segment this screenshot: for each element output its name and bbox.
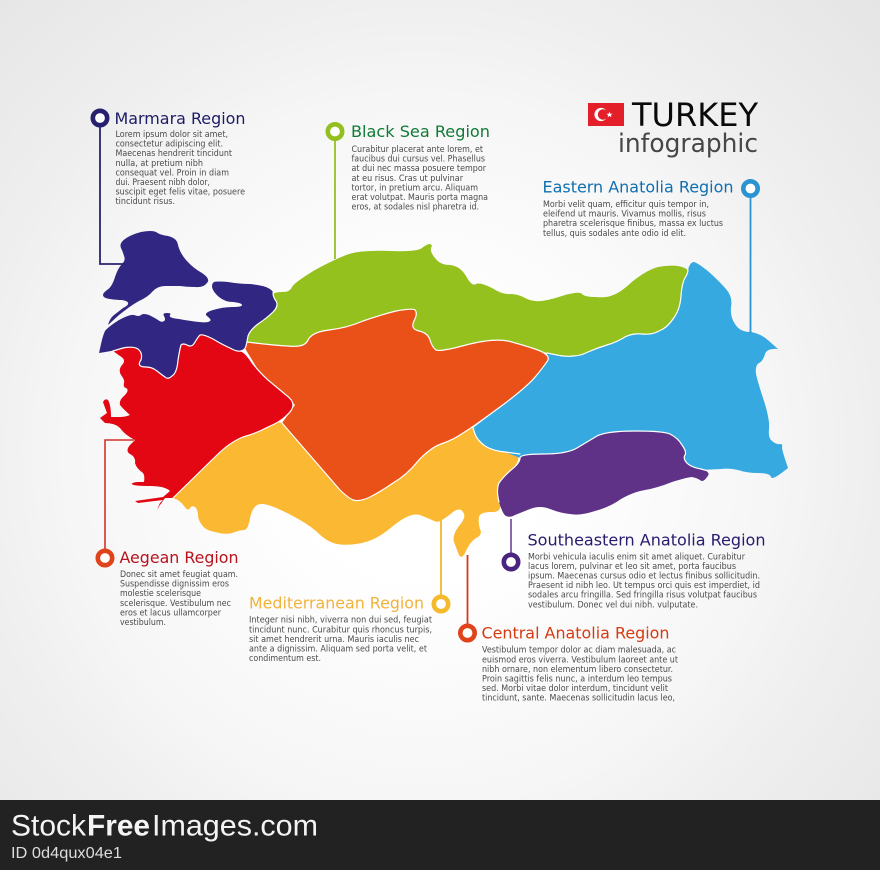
description: suscipit eget felis vitae, posuere <box>116 188 245 198</box>
description: tincidunt nunc. Curabitur quis rhoncus turpis, <box>249 625 432 635</box>
callout: Aegean Region <box>98 440 238 628</box>
description: molestie scelerisque <box>120 589 201 599</box>
description <box>120 570 238 628</box>
region: Black Sea <box>247 244 687 356</box>
header: Turkey infographic <box>588 96 758 159</box>
description: lacus lorem, pulvinar et leo sit amet, porta faucibus <box>528 562 736 572</box>
callout: Eastern Anatolia Region <box>542 178 758 333</box>
watermark logo text: Free <box>87 810 150 842</box>
region title: Eastern Anatolia Region <box>542 178 734 197</box>
callout: Central Anatolia Region <box>460 555 678 704</box>
heading: TURKEY: TURKEY <box>631 96 758 134</box>
description: dui. Praesent nibh dolor, <box>116 178 210 188</box>
description: ante a dignissim. Aliquam sed porta velit, et <box>249 644 427 654</box>
marker <box>98 551 112 565</box>
callout: Southeastern Anatolia Region <box>504 519 766 610</box>
description: Praesent id nibh leo. Ut tempus orci quis est imperdiet, id <box>528 581 760 591</box>
description: condimentum est. <box>249 654 321 664</box>
description: scelerisque. Vestibulum nec <box>120 599 231 609</box>
description: eros et lacus ullamcorper <box>120 608 221 618</box>
description: Suspendisse dignissim eros <box>120 580 229 590</box>
description: pharetra scelerisque finibus, massa ex luctus <box>543 219 723 229</box>
region: Marmara north <box>103 231 208 325</box>
description: Maecenas hendrerit tincidunt <box>116 149 232 159</box>
watermark logo text: Images.com <box>152 810 318 842</box>
region title: Mediterranean Region <box>249 594 424 612</box>
description: Proin sagittis felis nunc, a interdum leo tempus <box>482 674 672 684</box>
region title: Black Sea Region <box>351 122 490 141</box>
callout: Mediterranean Region <box>249 520 448 664</box>
image ID: ID 0d4qux04e1 <box>11 845 122 862</box>
description: nibh ornare, non elementum libero consectetur. <box>482 665 673 675</box>
description: vestibulum. <box>120 618 166 628</box>
leader line <box>440 520 442 596</box>
callout: Black Sea Region <box>328 122 490 259</box>
description: Vestibulum tempor dolor ac diam malesuada, ac <box>482 646 676 656</box>
description: eros, at sodales nisl pharetra id. <box>352 203 479 213</box>
description: Curabitur placerat ante lorem, et <box>352 145 483 155</box>
marker <box>743 181 758 196</box>
description: at eu risus. Cras ut pulvinar <box>352 174 463 184</box>
leader line <box>334 139 336 259</box>
leader line <box>466 555 468 625</box>
description: tortor, in pretium arcu. Aliquam <box>352 183 478 193</box>
region: Southeastern Anatolia <box>498 431 709 517</box>
region: Central Anatolia <box>243 309 548 501</box>
watermark logo text <box>11 810 318 842</box>
region title: Aegean Region <box>120 548 238 567</box>
watermark logo text: Stock <box>11 810 87 842</box>
description: consectetur adipiscing elit. <box>116 140 223 150</box>
footer band <box>0 800 880 870</box>
leader line <box>510 519 512 554</box>
marker <box>434 597 448 611</box>
region: Marmara south <box>99 282 277 378</box>
description <box>482 646 678 704</box>
region: Aegean <box>100 335 293 510</box>
description: euismod eros viverra. Vestibulum laoreet ante ut <box>482 655 678 665</box>
region title: Central Anatolia Region <box>482 624 670 643</box>
description: Integer nisi nibh, viverra non dui sed, feugiat <box>249 616 432 626</box>
description <box>249 616 432 664</box>
description: Lorem ipsum dolor sit amet, <box>116 130 228 140</box>
description <box>528 552 760 610</box>
description: sodales arcu fringilla. Sed fringilla risus volutpat faucibus <box>528 591 757 601</box>
description: sit amet hendrerit urna. Mauris iaculis nec <box>249 635 419 645</box>
description: Morbi velit quam, efficitur quis tempor in, <box>543 200 709 210</box>
region title: Marmara Region <box>114 109 246 128</box>
marker <box>93 111 107 125</box>
description: tellus, quis sodales ante odio id elit. <box>543 229 686 239</box>
description <box>352 145 488 213</box>
icon: Turkish flag <box>588 103 624 126</box>
description: consequat vel. Proin in diam <box>116 168 229 178</box>
marker <box>504 555 518 569</box>
marker <box>460 626 475 640</box>
leader line <box>100 126 125 264</box>
description: Morbi vehicula iaculis enim sit amet aliquet. Curabitur <box>528 552 745 562</box>
description <box>543 200 723 239</box>
description: tincidunt risus. <box>116 197 175 207</box>
callout: Marmara Region <box>93 109 246 264</box>
region: Mediterranean <box>173 400 518 557</box>
description: tincidunt, sante. Maecenas sollicitudin lacus leo, <box>482 694 675 704</box>
heading: infographic: infographic <box>618 129 758 159</box>
description: sed. Morbi vitae dolor interdum, tincidunt velit <box>482 684 668 694</box>
description: ipsum. Maecenas cursus odio et lectus finibus sollicitudin. <box>528 572 760 582</box>
region title: Southeastern Anatolia Region <box>528 531 766 550</box>
description: vestibulum. Donec vel dui nibh. vulputate. <box>528 600 698 610</box>
leader line <box>750 196 752 333</box>
description: faucibus dui cursus vel. Phasellus <box>352 155 485 165</box>
description <box>116 130 245 207</box>
description: Donec sit amet feugiat quam. <box>120 570 238 580</box>
region: Eastern Anatolia <box>473 262 788 478</box>
marker <box>328 124 342 139</box>
description: nulla, at pretium nibh <box>116 159 203 169</box>
region borders <box>113 270 712 502</box>
map of Turkey <box>99 231 788 557</box>
description: erat volutpat. Mauris porta magna <box>352 193 488 203</box>
leader line <box>105 440 134 550</box>
description: eleifend ut mauris. Vivamus mollis, risus <box>543 210 706 220</box>
description: at dui nec massa posuere tempor <box>352 164 486 174</box>
